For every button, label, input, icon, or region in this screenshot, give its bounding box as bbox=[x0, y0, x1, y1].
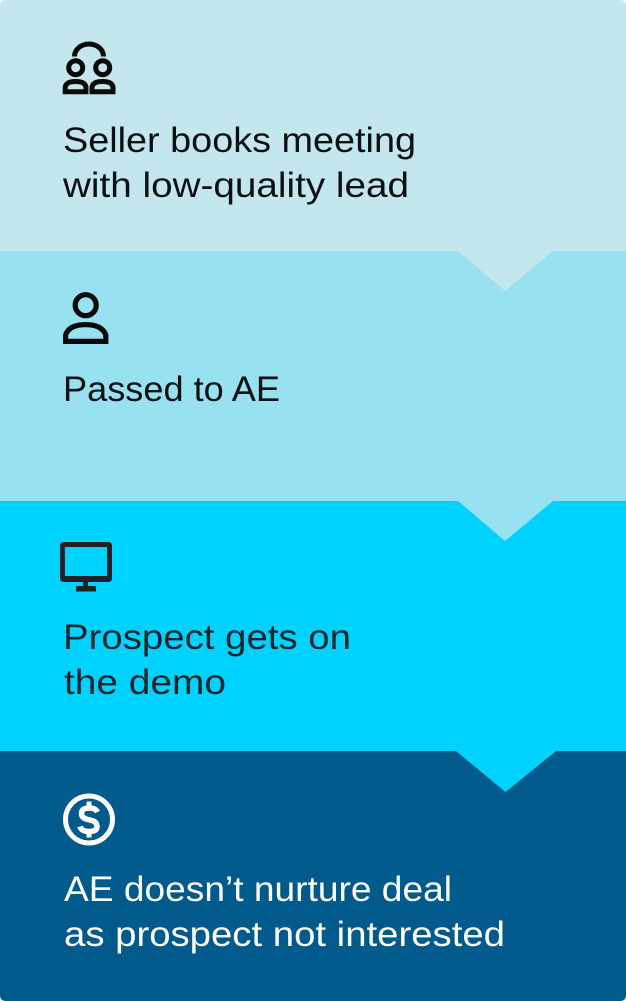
heading: step 1 text: Seller books meeting bbox=[63, 121, 416, 160]
heading: step 4 text bbox=[64, 870, 505, 954]
heading: step 1 text bbox=[62, 121, 416, 205]
icon: person bbox=[66, 295, 106, 341]
arrow: notch from step 3 bbox=[456, 751, 556, 792]
panel: step 3 prospect gets on demo bbox=[0, 501, 626, 751]
heading: step 4 text: AE doesn’t nurture deal bbox=[64, 870, 452, 909]
heading: step 2 text: Passed to AE bbox=[63, 370, 280, 409]
heading: step 1 text: with low-quality lead bbox=[62, 166, 409, 205]
panel: step 4 AE doesn't nurture deal bbox=[0, 751, 626, 1001]
arrow: notch from step 2 bbox=[458, 501, 553, 541]
panel: step 2 passed to AE bbox=[0, 251, 626, 501]
arrow: notch from step 1 bbox=[458, 251, 553, 291]
icon: monitor bbox=[60, 542, 112, 592]
heading: step 3 text bbox=[63, 618, 351, 702]
heading: step 4 text: as prospect not interested bbox=[64, 915, 505, 954]
panel: step 1 seller books meeting bbox=[0, 0, 626, 251]
icon: group of two people bbox=[65, 44, 113, 92]
heading: step 3 text: Prospect gets on bbox=[63, 618, 351, 657]
icon: dollar coin bbox=[66, 796, 112, 843]
heading: step 3 text: the demo bbox=[64, 663, 226, 702]
